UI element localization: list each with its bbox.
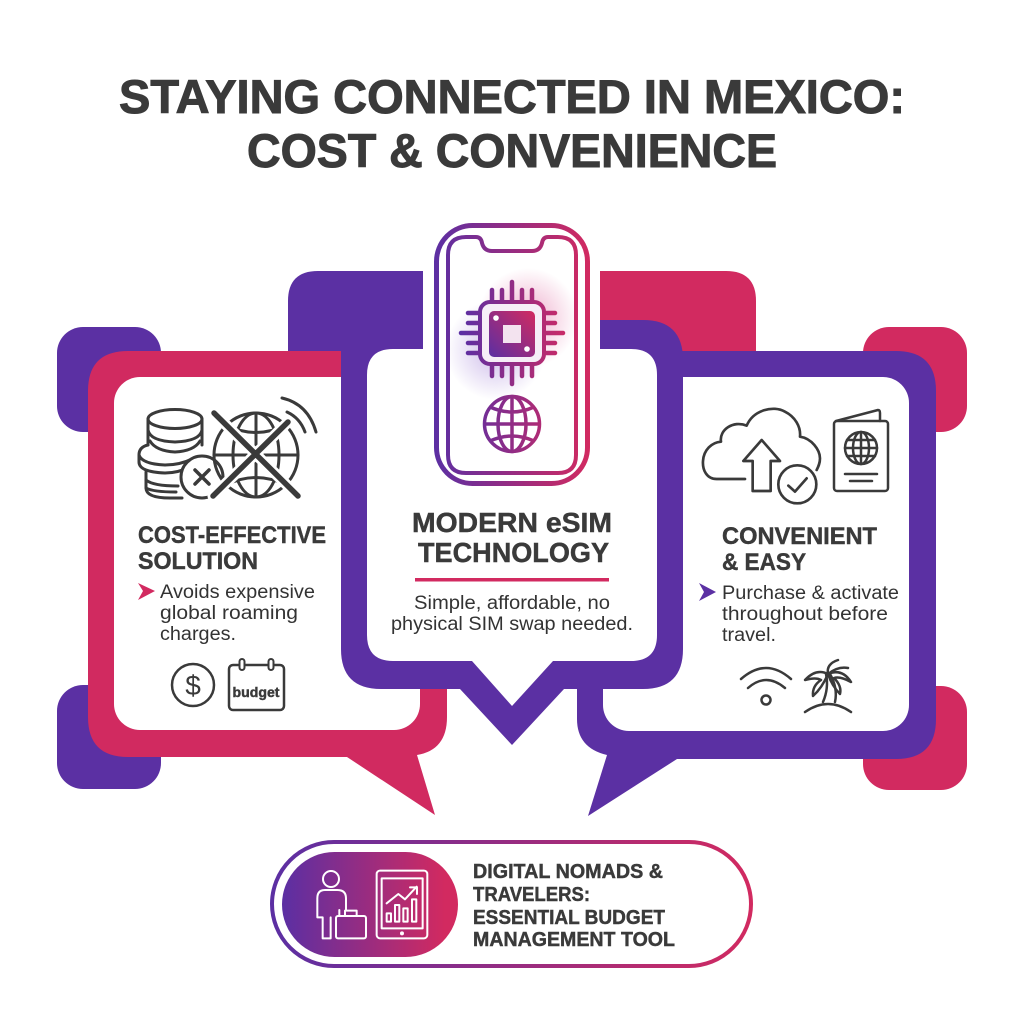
- pill text: ESSENTIAL BUDGET: [473, 907, 665, 929]
- center body text: physical SIM swap needed.: [391, 614, 633, 635]
- pill text: DIGITAL NOMADS &: [473, 861, 663, 883]
- left bullet arrow: [138, 583, 155, 600]
- icon: budget calendar: budget: [232, 684, 280, 700]
- background block: pink behind phone: [600, 271, 756, 360]
- right icon: passport: [834, 410, 888, 491]
- left bubble interior: [114, 377, 420, 730]
- phone outer frame: [436, 226, 588, 484]
- right heading: CONVENIENT: [722, 523, 877, 550]
- panel: digital nomads pill: [272, 842, 751, 966]
- left heading: [138, 522, 326, 575]
- right body text: travel.: [722, 625, 776, 646]
- icon: budget calendar: [229, 659, 284, 710]
- phone screen with notch: [448, 237, 576, 473]
- left body text: global roaming: [160, 603, 298, 624]
- right heading: & EASY: [722, 549, 806, 576]
- right body text: [722, 583, 899, 646]
- icon: eSIM chip: [461, 282, 563, 384]
- background block: purple behind phone: [288, 271, 423, 351]
- center heading: TECHNOLOGY: [418, 537, 609, 568]
- phone illustration: [436, 226, 588, 484]
- panel: cost-effective: [88, 351, 447, 815]
- left body text: charges.: [160, 624, 236, 645]
- right bullet arrow: [699, 583, 716, 601]
- pill text: MANAGEMENT TOOL: [473, 929, 675, 951]
- right heading: [722, 523, 877, 576]
- left body text: [160, 582, 315, 645]
- corner square: left bottom: [57, 685, 161, 789]
- title: [119, 70, 905, 177]
- corner square: right top: [863, 327, 967, 432]
- icon: dollar coin: [172, 664, 214, 706]
- icon: palm tree: [805, 660, 851, 712]
- pill outline: [272, 842, 751, 966]
- right icon: cloud upload with check: [703, 409, 820, 503]
- center body text: Simple, affordable, no: [414, 593, 610, 614]
- right bubble interior: [603, 377, 909, 731]
- corner square: right bottom: [863, 686, 967, 790]
- icon: traveler with suitcase: [317, 871, 366, 938]
- right body text: Purchase & activate: [722, 583, 899, 604]
- left icon: coins and crossed globe: [139, 398, 316, 498]
- right speech bubble frame: [577, 351, 936, 816]
- center body text: [391, 593, 633, 635]
- icon: dollar coin: $: [185, 670, 201, 701]
- center heading: MODERN eSIM: [412, 507, 612, 538]
- chip glow: [446, 268, 578, 400]
- icon: wifi: [741, 668, 791, 704]
- panel: convenient: [577, 351, 936, 816]
- left speech bubble frame: [88, 351, 447, 815]
- left body text: Avoids expensive: [160, 582, 315, 603]
- left heading: SOLUTION: [138, 548, 258, 575]
- center bubble interior: [367, 349, 657, 706]
- corner square: left top: [57, 327, 161, 432]
- pill icon badge: [282, 852, 458, 957]
- title: COST & CONVENIENCE: [247, 124, 777, 177]
- center divider: [415, 578, 609, 582]
- title: STAYING CONNECTED IN MEXICO:: [119, 70, 905, 123]
- pill text: TRAVELERS:: [473, 884, 590, 906]
- left heading: COST-EFFECTIVE: [138, 522, 326, 549]
- panel: modern eSIM: [341, 320, 683, 745]
- center heading: [412, 507, 612, 568]
- pill text: [473, 861, 675, 951]
- right body text: throughout before: [722, 604, 888, 625]
- center speech bubble frame: [341, 320, 683, 745]
- icon: globe: [484, 396, 540, 452]
- icon: tablet with chart: [377, 871, 427, 938]
